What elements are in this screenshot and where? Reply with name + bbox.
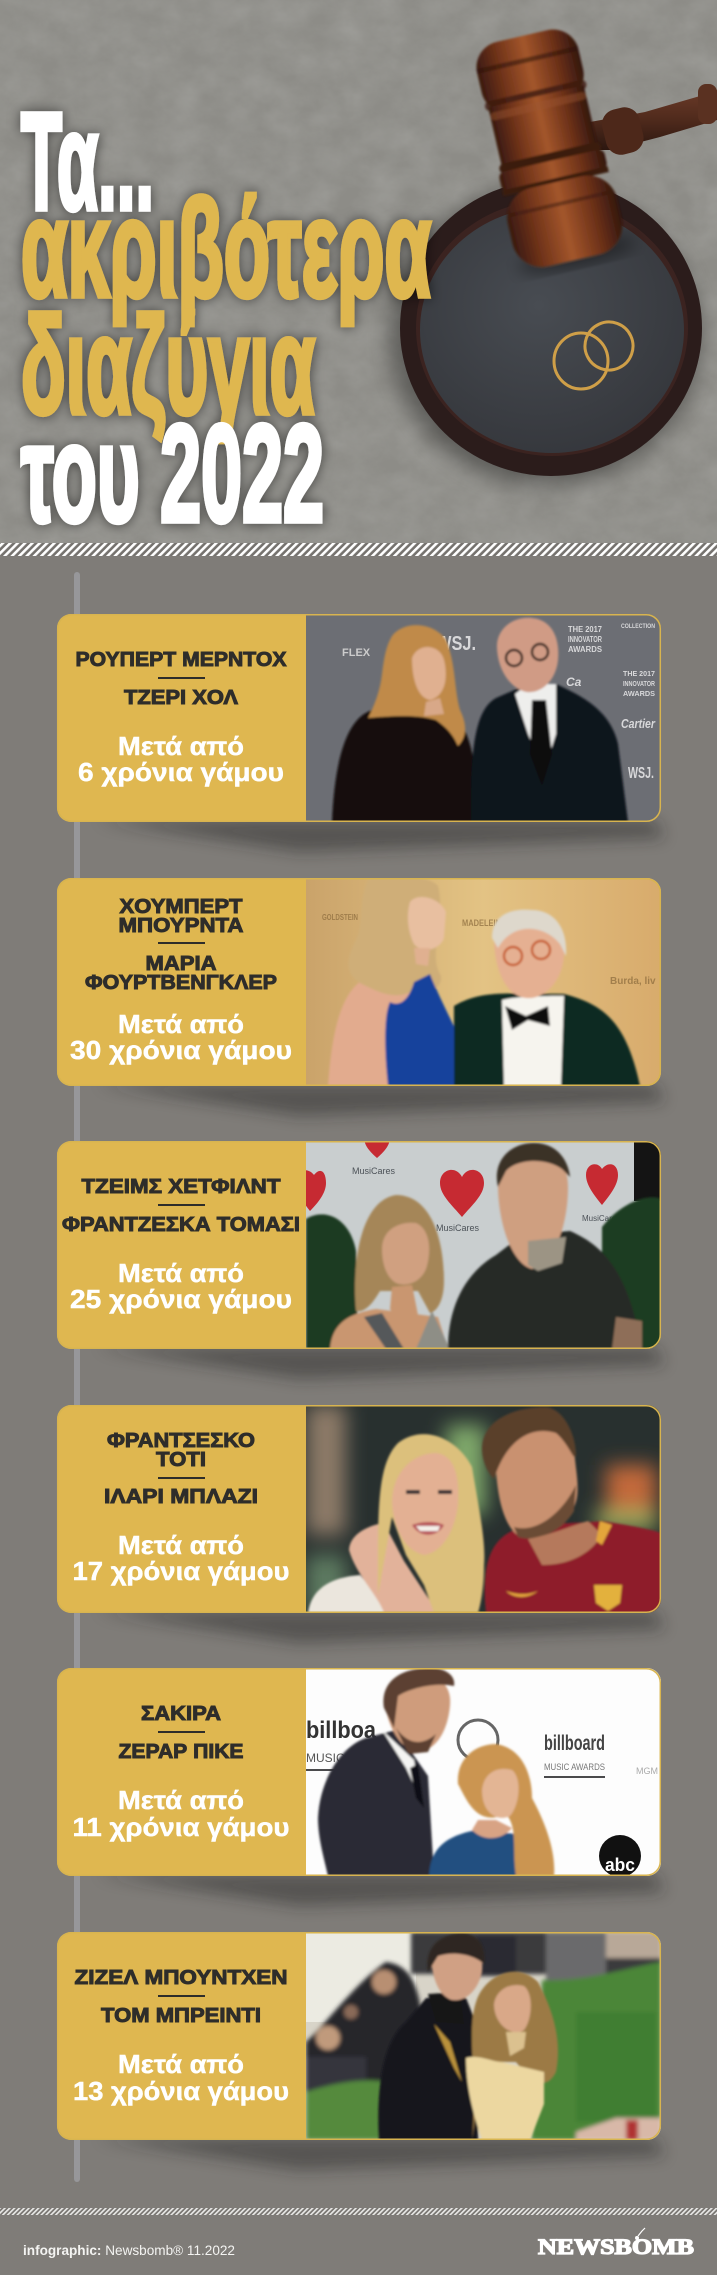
names: ΙΛΑΡΙ ΜΠΛΑΖΙ [104, 1486, 258, 1508]
timeline line [74, 572, 80, 2182]
names: ΤΟΜ ΜΠΡΕΙΝΤΙ [101, 2005, 261, 2027]
hatched divider bottom [0, 2208, 717, 2215]
names: ΣΑΚΙΡΑ [141, 1703, 221, 1725]
photo: couple at WSJ awards: AWARDS [568, 645, 603, 654]
photo: couple at WSJ awards: INNOVATOR [568, 635, 602, 644]
duration: Μετά από [118, 731, 244, 761]
duration [72, 1530, 290, 1586]
names: ΤΖΕΡΙ ΧΟΛ [124, 687, 239, 709]
names: ΦΟΥΡΤΒΕΝΓΚΛΕΡ [85, 972, 277, 994]
title: του 2022 [21, 397, 324, 551]
photo: couple at MusiCares: MusiCares [436, 1223, 480, 1233]
duration: 6 χρόνια γάμου [78, 757, 284, 787]
icon: gavel and sound block with wedding rings [389, 22, 717, 486]
card shadows [95, 820, 665, 2170]
photo: couple at Billboard awards: billboard [544, 1732, 605, 1755]
photo: couple at WSJ awards: WSJ. [436, 633, 476, 655]
icon: gavel handle [590, 84, 717, 158]
names: ΖΙΖΕΛ ΜΠΟΥΝΤΧΕΝ [74, 1967, 288, 1989]
duration [70, 1258, 292, 1314]
title: διαζύγια [21, 289, 315, 443]
photo: couple at WSJ awards: Cartier [621, 716, 656, 731]
duration [78, 731, 284, 787]
names [104, 1430, 258, 1508]
photo: couple at WSJ awards: FLEX [342, 647, 371, 659]
photo: couple at WSJ awards: COLLECTION [621, 624, 655, 630]
photo: couple at WSJ awards: Ca [566, 675, 582, 689]
photo: couple at MusiCares: MusiCares [582, 1214, 620, 1223]
panel: Totti - Blasi [57, 1405, 661, 1613]
names [62, 1176, 300, 1236]
names: ΦΡΑΝΤΣΕΣΚΟ [107, 1430, 255, 1452]
photo: couple at WSJ awards: WSJ. [628, 765, 654, 782]
duration [73, 2049, 289, 2106]
hatched divider top [0, 543, 717, 556]
photo: couple in front of gold backdrop: Burda, liv [610, 976, 656, 987]
duration [72, 1785, 290, 1842]
duration: Μετά από [118, 1009, 244, 1039]
duration: 13 χρόνια γάμου [73, 2076, 289, 2106]
photo: couple at Met Gala [306, 1932, 661, 2140]
panel: Shakira - Pique [57, 1668, 661, 1877]
photo: couple in front of gold backdrop: GOLDSTEIN [322, 913, 358, 922]
photo: couple at Billboard awards: MUSIC [306, 1751, 345, 1765]
names: ΡΟΥΠΕΡΤ ΜΕΡΝΤΟΧ [76, 649, 287, 671]
duration: Μετά από [118, 2049, 244, 2079]
header: concrete background [0, 0, 717, 543]
names: ΦΡΑΝΤΖΕΣΚΑ ΤΟΜΑΣΙ [62, 1214, 300, 1236]
photo: couple with Roma jersey [306, 1405, 661, 1613]
title: Τα... [21, 85, 154, 239]
names: ΜΑΡΙΑ [146, 953, 216, 975]
names: ΜΠΟΥΡΝΤΑ [118, 915, 244, 937]
photo: couple at WSJ awards: THE 2017 [623, 671, 655, 678]
names: ΤΟΤΙ [156, 1449, 206, 1471]
photo: couple at WSJ awards: THE 2017 [568, 625, 603, 634]
duration: 11 χρόνια γάμου [72, 1812, 290, 1842]
photo: couple at MusiCares [296, 1137, 661, 1349]
photo: couple in front of gold backdrop [306, 876, 661, 1086]
panel: Burda - Furtwangler [57, 876, 661, 1086]
photo: couple at Billboard awards: abc [605, 1855, 635, 1875]
icon: wedding rings [554, 315, 640, 389]
logo: Newsbomb: NEWSBOMB [538, 2234, 694, 2259]
duration: 30 χρόνια γάμου [70, 1035, 292, 1065]
title [21, 85, 431, 551]
photo: couple in front of gold backdrop: MADELEINE [462, 918, 506, 928]
panel: Murdoch - Hall [57, 614, 661, 822]
photo: couple at Billboard awards [306, 1668, 661, 1877]
photo: couple at WSJ awards: INNOVATOR [623, 681, 655, 688]
duration: Μετά από [118, 1785, 244, 1815]
duration: 25 χρόνια γάμου [70, 1284, 292, 1314]
photo: couple at Billboard awards: billboa [306, 1717, 377, 1744]
photo: couple at MusiCares: MusiCares [352, 1166, 396, 1176]
names: ΧΟΥΜΠΕΡΤ [120, 896, 242, 918]
photo: couple at WSJ awards [306, 614, 661, 822]
panel: Hetfield - Tomasi [57, 1137, 661, 1349]
logo: Newsbomb [538, 2228, 694, 2259]
footer credit: infographic: Newsbomb® 11.2022 [23, 2243, 235, 2258]
names [76, 649, 287, 709]
duration: Μετά από [118, 1530, 244, 1560]
names: ΖΕΡΑΡ ΠΙΚΕ [118, 1741, 244, 1763]
names: ΤΖΕΙΜΣ ΧΕΤΦΙΛΝΤ [82, 1176, 280, 1198]
photo: couple at Billboard awards: MGM [636, 1766, 658, 1776]
photo: couple at Billboard awards: MUSIC AWARDS [544, 1762, 605, 1772]
photo: couple at WSJ awards: AWARDS [623, 691, 655, 698]
names [85, 896, 277, 994]
duration: 17 χρόνια γάμου [72, 1556, 290, 1586]
duration: Μετά από [118, 1258, 244, 1288]
panel: Bundchen - Brady [57, 1932, 661, 2140]
names [118, 1703, 244, 1763]
duration [70, 1009, 292, 1065]
icon: gavel head [467, 22, 638, 280]
names [74, 1967, 288, 2027]
